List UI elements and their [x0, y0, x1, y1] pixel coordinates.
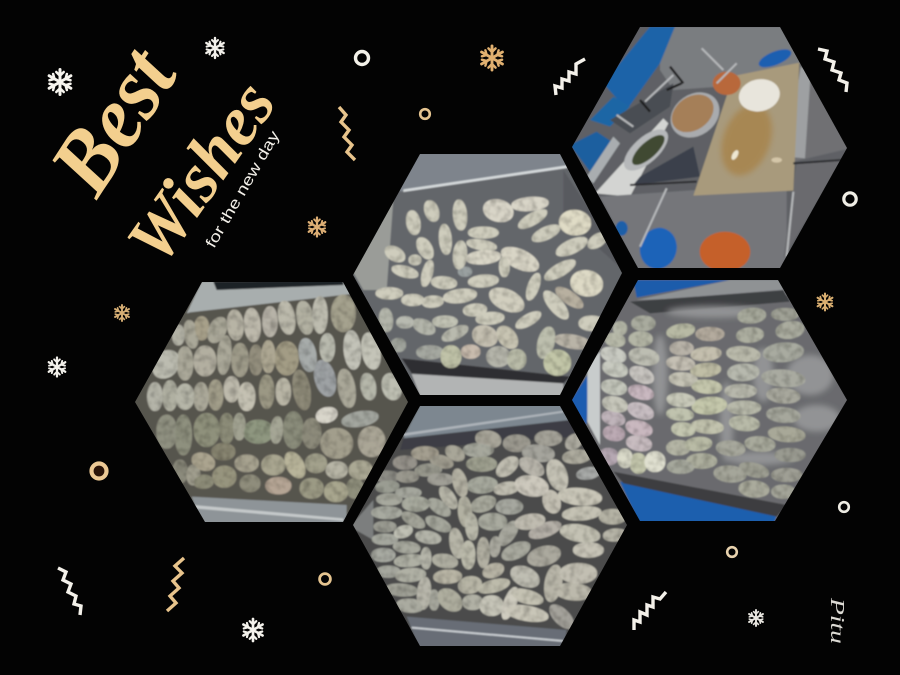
signature: Pitu: [826, 597, 848, 644]
hexagon photo: crowded tray of pleated dumplings, bottom: [350, 400, 630, 650]
icon: gold zigzag, top centre: [339, 107, 355, 160]
icon: gold snowflake, left: [115, 305, 129, 321]
hexagon photo: tray of dumplings in columns with blue surround, right: [570, 275, 855, 525]
icon: white snowflake, top: [206, 38, 224, 58]
icon: white ring, top centre: [356, 52, 368, 64]
hexagon photo: prep table with bowls of filling and dough: [572, 27, 847, 268]
icon: white snowflake, far left: [49, 70, 71, 94]
icon: gold snowflake, centre left: [309, 218, 325, 236]
icon: gold ring, left: [92, 464, 106, 478]
icon: white snowflake, left middle: [49, 358, 65, 376]
icon: white zigzag, bottom left: [58, 568, 81, 615]
icon: gold snowflake, right: [818, 294, 832, 310]
icon: white ring, lower right: [839, 502, 849, 512]
icon: gold zigzag, bottom left: [167, 558, 184, 611]
icon: white snowflake, bottom: [243, 619, 263, 641]
icon: gold ring, bottom: [320, 574, 330, 584]
icon: gold ring, top centre: [420, 109, 430, 119]
icon: white snowflake, bottom right: [749, 610, 763, 626]
title: Best Wishes script lettering: [30, 29, 291, 277]
hexagon photo: tray of loosely placed dumplings: [350, 150, 630, 400]
subtitle: for the new day: for the new day: [203, 128, 284, 251]
title word: Best: Best: [30, 29, 197, 212]
icon: white zigzag, bottom right: [634, 592, 666, 630]
icon: gold snowflake, top centre: [482, 46, 502, 70]
icon: white ring, right: [844, 193, 856, 205]
icon: white zigzag, top centre: [555, 59, 585, 95]
icon: white zigzag, top right: [818, 49, 847, 92]
hexagon photo: tray of dumplings in rows, left: [130, 275, 415, 525]
icon: gold ring, lower right: [727, 547, 737, 557]
title word: Wishes: Wishes: [112, 68, 291, 277]
